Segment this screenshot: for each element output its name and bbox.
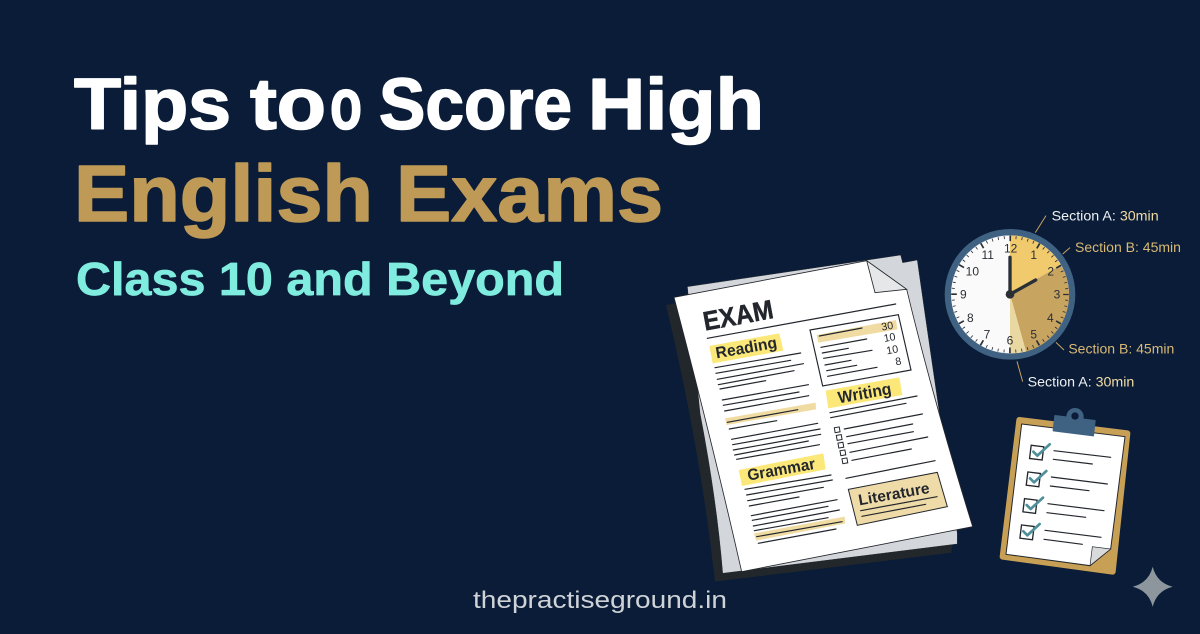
hour ticks (954, 238, 1066, 350)
clipboard board (1003, 420, 1127, 572)
section: Reading: Reading (714, 335, 778, 362)
clipboard clip (1053, 408, 1095, 436)
callout: Section B bottom: Section B: 45min (1068, 342, 1174, 357)
clock numerals: 4 (1047, 311, 1054, 325)
clipboard illustration (1003, 408, 1127, 572)
callout: Section A bottom (1017, 361, 1134, 389)
callout: Section A top (1035, 209, 1159, 233)
clock numerals: 10 (966, 265, 979, 279)
callout: Section A top: Section A: 30min (1052, 209, 1159, 224)
callout: Section B top: Section B: 45min (1075, 240, 1181, 255)
title: Tips too Score High: Score (379, 65, 572, 145)
clock numerals: 8 (967, 311, 974, 325)
main paper sheet (674, 261, 973, 572)
sparkle star (1133, 567, 1173, 607)
clock numerals: 12 (1004, 242, 1018, 256)
wedge: section A start (1010, 235, 1061, 294)
marks table: 10 (885, 343, 899, 357)
page fold (867, 261, 907, 293)
title: Tips too Score High: to (250, 65, 326, 145)
title: Tips too Score High: High (588, 65, 764, 145)
clock numerals (960, 242, 1061, 348)
clock rim (945, 229, 1075, 360)
subheading: Class 10 and Beyond: Class 10 and Beyond (76, 253, 564, 305)
checklist rows (1020, 444, 1111, 544)
footer website: thepractiseground.in (473, 587, 727, 614)
section: Writing: Writing (836, 379, 893, 407)
wedge: section A end (1010, 294, 1026, 353)
clock numerals: 1 (1030, 248, 1037, 262)
marks table: 8 (894, 355, 902, 368)
clock hands (1006, 257, 1036, 299)
checklist paper (1006, 424, 1125, 566)
clock numerals: 6 (1007, 334, 1014, 348)
exam paper illustration (666, 255, 973, 582)
section: Grammar: Grammar (746, 456, 817, 485)
title: Tips too Score High (74, 65, 764, 145)
clock numerals: 3 (1054, 288, 1061, 302)
clock numerals: 5 (1030, 327, 1037, 341)
clock face (951, 235, 1069, 353)
title: Tips too Score High: o (330, 65, 362, 145)
clock numerals: 11 (981, 248, 994, 262)
back sheets (687, 255, 957, 573)
section: Writing (826, 377, 935, 478)
clock illustration (945, 209, 1181, 389)
clock numerals: 2 (1047, 265, 1054, 279)
marks table: 30 (880, 320, 894, 334)
heading: English Exams: English Exams (74, 149, 663, 238)
title: Tips too Score High: Tips (74, 65, 231, 145)
marks table: 10 (883, 331, 897, 345)
section: Grammar (739, 453, 845, 543)
section: Literature: Literature (857, 480, 931, 509)
EXAM heading: EXAM (701, 294, 776, 337)
callout: Section A bottom: Section A: 30min (1028, 374, 1134, 389)
wedge: section B (1010, 265, 1069, 352)
minute ticks (953, 237, 1067, 351)
clock numerals: 9 (960, 288, 967, 302)
section: Literature (848, 472, 947, 525)
marks table (810, 315, 911, 386)
clock numerals: 7 (984, 327, 991, 341)
section: Reading (709, 333, 821, 459)
paper fold (1090, 547, 1111, 566)
paper shadow (666, 300, 952, 582)
